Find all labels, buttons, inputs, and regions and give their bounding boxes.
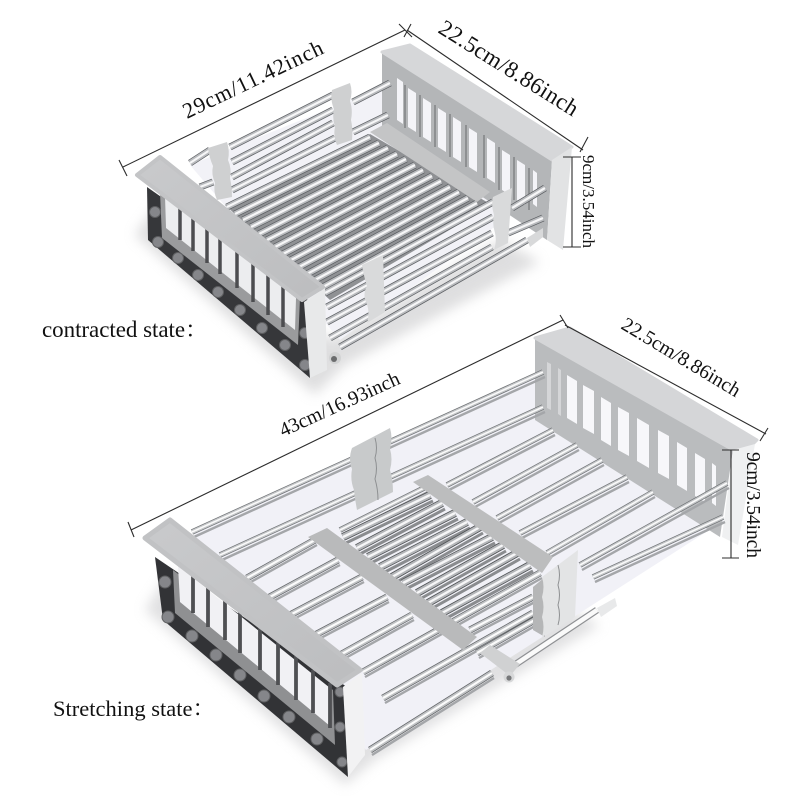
bolts (150, 206, 310, 370)
near support strip (308, 528, 477, 650)
dimension lines: contracted (119, 24, 588, 247)
front end frame side (304, 288, 327, 378)
far support strip (413, 475, 553, 573)
label: stretched length: 43cm/16.93inch (276, 368, 403, 442)
label: stretching state: Stretching state： (53, 696, 215, 721)
slider clip 1 (208, 142, 232, 200)
front end frame top (137, 157, 323, 300)
slider clip 3 (492, 188, 512, 250)
extension rod (507, 610, 597, 670)
dark outer panel (155, 557, 348, 777)
dense rods backing (225, 134, 492, 300)
inner slatted panel (160, 192, 300, 345)
slider clip 4 (362, 255, 385, 323)
end stop (527, 228, 543, 247)
thumb screw (329, 352, 341, 364)
dark outer panel (147, 187, 310, 378)
rear end frame with slots (535, 328, 757, 545)
rear support strip (370, 123, 490, 202)
front end frame side (343, 673, 365, 777)
thumb screw (504, 672, 514, 682)
rear end frame with slots (382, 45, 572, 250)
basket shadow (145, 570, 600, 785)
label: contracted state: contracted state： (42, 317, 208, 342)
basket floor (192, 372, 725, 750)
steel rods (190, 83, 545, 347)
panel: contracted basket (135, 45, 572, 395)
bolts (159, 576, 347, 767)
front steel rods (247, 540, 542, 755)
label: stretched width: 22.5cm/8.86inch (617, 313, 744, 402)
dense center rods (343, 495, 533, 619)
near clip (533, 550, 578, 637)
extension rod highlight (507, 610, 597, 670)
label: stretched height: 9cm/3.54inch (742, 452, 763, 558)
label: contracted height: 9cm/3.54inch (579, 155, 598, 248)
label: contracted length: 29cm/11.42inch (178, 35, 327, 124)
dimension lines: stretched (128, 315, 768, 558)
label: contracted width: 22.5cm/8.86inch (434, 15, 584, 121)
long steel rods (192, 372, 729, 582)
panel: stretched basket (145, 328, 757, 785)
basket shadow (135, 200, 540, 395)
inner slatted panel (173, 566, 335, 745)
detached top clip (350, 428, 393, 510)
front end frame top (145, 520, 360, 685)
slider clip 2 (331, 83, 352, 145)
end stop (597, 598, 617, 617)
basket floor (190, 85, 545, 340)
lock tab (480, 645, 520, 676)
